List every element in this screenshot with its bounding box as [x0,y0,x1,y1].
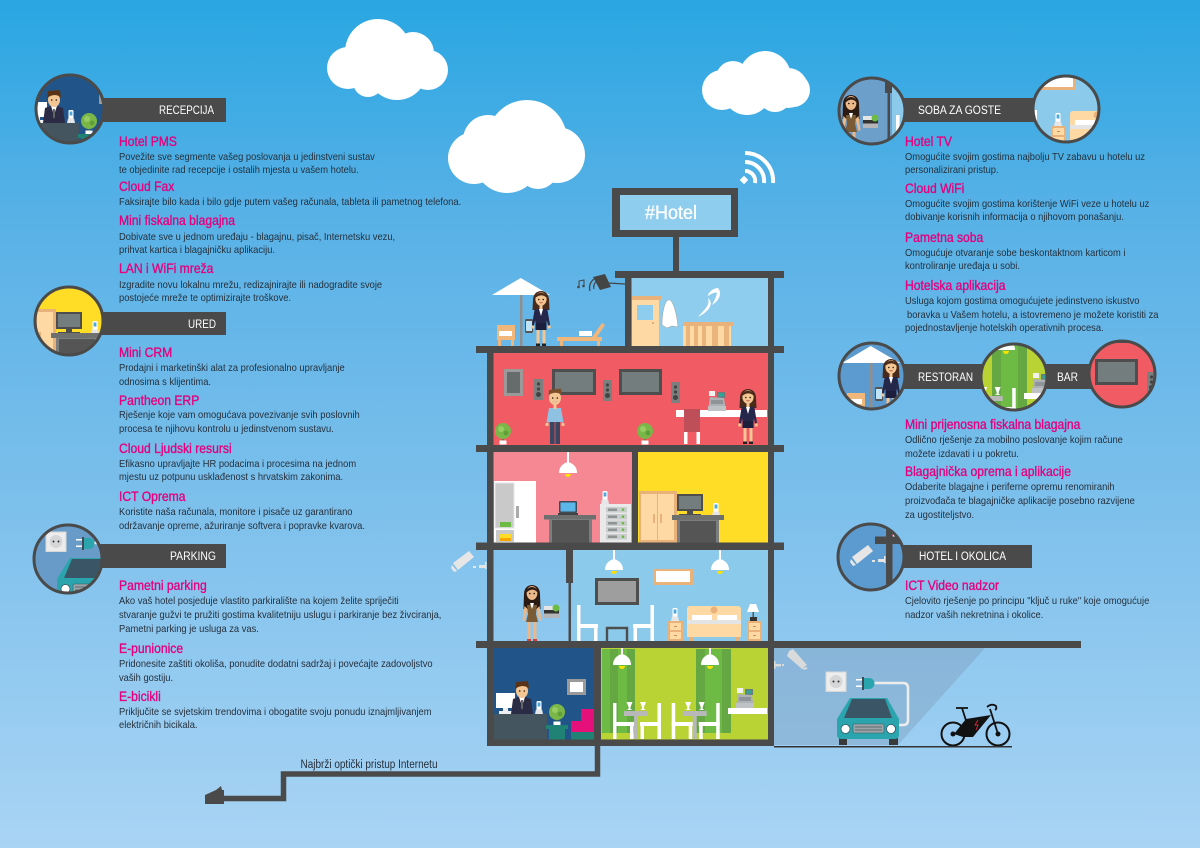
text block: hotel i okolica services [905,577,1150,621]
security camera: right [774,649,808,670]
text block: parking services: Priključite se svjetskim trendovima i obogatite svoju ponudu iznajmljivanjem [119,707,431,718]
text block: parking services: stvaranje gužvi te pružiti gostima kvalitetniju uslugu i parkiranje bez živciranja, [119,610,441,621]
text block: parking services: Pametni parking [119,577,207,593]
text block: parking services: E-bicikli [119,688,161,704]
text block: soba za goste services: Omogućite svojim gostima najbolju TV zabavu u hotelu uz [905,152,1145,163]
section header: parking: PARKING [170,551,216,563]
yellow room: office [639,491,724,543]
electric car [837,698,899,745]
text block: recepcija services: Faksirajte bilo kada i bilo gdje putem vašeg računala, tableta ili pametnog telefona. [119,197,461,208]
building structure [476,188,1081,746]
ground floor: restaurant and bar [602,644,767,739]
pink room: server office [494,452,631,543]
text block: soba za goste services: personalizirani pristup. [905,165,999,176]
section header: hotel i okolica: HOTEL I OKOLICA [919,551,1006,563]
cloud: centre [448,100,585,193]
cloud: right [702,51,810,115]
electric bicycle [942,705,1010,746]
third floor: reception hallway [522,585,560,642]
section header: ured: URED [188,319,216,331]
text block: recepcija services: Cloud Fax [119,178,175,194]
icon: wifi signal [740,153,773,184]
text block: soba za goste services [905,133,1159,334]
icon: power outlet [826,672,846,692]
text block: restoran services [905,416,1135,521]
security camera: left [451,551,486,572]
circle: security camera view [840,526,902,588]
text block: soba za goste services: Usluga kojom gostima omogućujete jedinstveno iskustvo [905,296,1140,307]
circle: guest room right view [1034,78,1098,140]
text block: ured services: Efikasno upravljajte HR podacima i procesima na jednom [119,459,356,470]
section header: restoran and bar: RESTORAN [918,372,973,384]
section header: ured [34,286,226,356]
top room: wellness [632,288,733,346]
text block: soba za goste services: Hotelska aplikacija [905,277,1006,293]
text block: recepcija services: LAN i WiFi mreža [119,260,214,276]
cable label: Najbrži optički pristup Internetu [300,759,438,771]
text block: hotel i okolica services: nadzor vaših nekretnina i okolice. [905,610,1043,621]
third floor: guest room [577,549,762,642]
section header: recepcija [34,74,226,144]
ground line [774,746,1012,748]
text block: soba za goste services: kontroliranje uređaja u sobi. [905,261,1020,272]
text block: restoran services: za ugostiteljstvo. [905,510,974,521]
section header: hotel i okolica [836,522,1032,592]
text block: parking services: E-punionice [119,640,183,656]
text block: soba za goste services: dobivanje korisnih informacija o njihovom ponašanju. [905,212,1124,223]
text block: ured services: održavanje opreme, ažuriranje softvera i popravke kvarova. [119,521,365,532]
text block: recepcija services [119,133,461,304]
text block: restoran services: Odaberite blagajne i periferne opremu renomiranih [905,482,1115,493]
section header: restoran and bar: BAR [1057,372,1078,384]
icon: outdoor speaker with sound [577,274,625,291]
text block: restoran services: Mini prijenosna fiskalna blagajna [905,416,1081,432]
fibre cable with connector [205,746,598,804]
section header: parking [32,524,226,594]
text block: recepcija services: Izgradite novu lokalnu mrežu, redizajnirajte ili nadogradite svoje [119,280,383,291]
text block: ured services: Prodajni i marketinški alat za profesionalno upravljanje [119,363,345,374]
text block: ured services: Pantheon ERP [119,392,199,408]
cloud: top centre [327,19,448,100]
circle: reception view [38,76,102,142]
text block: soba za goste services: Hotel TV [905,133,952,149]
text block: hotel i okolica services: Cjelovito rješenje po principu "ključ u ruke" koje omogućuje [905,596,1150,607]
text block: ured services: Koristite naša računala, monitore i pisače uz garantirano [119,507,353,518]
parking shade area [774,648,985,745]
text block: recepcija services: Mini fiskalna blagajna [119,212,236,228]
text block: parking services: električnih bicikala. [119,720,198,731]
text block: recepcija services: Povežite sve segmente vašeg poslovanja u jedinstveni sustav [119,152,375,163]
text block: restoran services: Blagajnička oprema i aplikacije [905,463,1071,479]
text block: ured services: Cloud Ljudski resursi [119,440,232,456]
text block: ured services: odnosima s klijentima. [119,377,211,388]
sign text: #Hotel [645,203,697,224]
text block: ured services: mjestu uz potpunu usklađenost s hrvatskim zakonima. [119,472,343,483]
room fills [493,278,769,740]
circle: parking view [36,526,100,592]
text block: hotel i okolica services: ICT Video nadzor [905,577,1000,593]
text block: soba za goste services: Omogućuje otvaranje sobe beskontaktnom karticom i [905,248,1125,259]
circle: guest room left view [840,80,904,142]
hotel building [205,188,1081,804]
text block: parking services: Pridonesite zaštiti okoliša, ponudite dodatni sadržaj i povećajte zadovoljstvo [119,659,433,670]
text block: restoran services: Odlično rješenje za mobilno poslovanje kojim račune [905,435,1123,446]
section header: soba za goste [838,74,1100,146]
circle: office view [36,288,102,354]
circle: terrace view [840,344,904,408]
text block: recepcija services: postojeće mreže te optimizirajte troškove. [119,293,291,304]
text block: restoran services: proizvođača te blagajničke aplikacije posebno razvijene [905,496,1135,507]
text block: recepcija services: prihvat kartica i blagajničku aplikaciju. [119,245,275,256]
text block: restoran services: možete izdavati i u pokretu. [905,449,1019,460]
text block: ured services: Rješenje koje vam omogućava povezivanje svih poslovnih [119,410,360,421]
text block: soba za goste services: boravka u Vašem hotelu, a istovremeno je možete koristiti za [907,310,1159,321]
section header: recepcija: RECEPCIJA [159,105,214,117]
text block: parking services: Ako vaš hotel posjeduje vlastito parkiralište na kojem želite spriječiti [119,596,399,607]
text block: soba za goste services: Omogućite svojim gostima korištenje WiFi veze u hotelu uz [905,199,1149,210]
text block: parking services: vaših gostiju. [119,673,173,684]
circle: bar view [1090,342,1154,406]
text block: soba za goste services: Pametna soba [905,229,984,245]
sign panel [620,195,731,230]
text block: parking services [119,577,441,731]
text block: recepcija services: te objedinite rad recepcije i ostalih mjesta u vašem hotelu. [119,165,359,176]
text block: ured services [119,344,365,532]
red floor: conference room [495,369,767,444]
text block: ured services: procesa te njihovu kontrolu u jedinstvenom sustavu. [119,424,334,435]
circle: restaurant view [982,346,1046,408]
section header: restoran and bar [838,340,1156,412]
ground floor: lobby [494,679,594,740]
text block: soba za goste services: Cloud WiFi [905,180,964,196]
rooftop terrace [492,278,605,346]
text block: recepcija services: Dobivate sve u jednom uređaju - blagajnu, pisač, Internetsku vezu, [119,232,395,243]
text block: ured services: Mini CRM [119,344,172,360]
text block: ured services: ICT Oprema [119,488,186,504]
text block: recepcija services: Hotel PMS [119,133,177,149]
text block: parking services: Pametni parking je usluga za vas. [119,624,259,635]
charging cable and plug [856,677,908,725]
text block: soba za goste services: pojednostavljenje hotelskih operativnih procesa. [905,323,1104,334]
section header: soba za goste: SOBA ZA GOSTE [918,105,1001,117]
